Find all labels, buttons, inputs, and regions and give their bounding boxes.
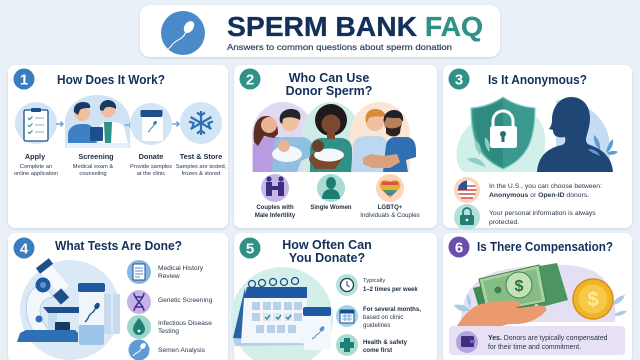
main banknote: $ bbox=[515, 278, 524, 295]
illustration: families bbox=[252, 102, 416, 172]
text: donor choice bbox=[489, 183, 602, 199]
list: tests bbox=[127, 260, 213, 360]
subtitle: Answers to common questions about sperm donation bbox=[227, 43, 453, 52]
label: Testing bbox=[158, 328, 179, 335]
illustration: hand holding money and coin bbox=[454, 263, 627, 326]
step labels: Apply bbox=[25, 152, 46, 161]
step labels: Provide samples bbox=[130, 164, 172, 170]
label: Infectious Disease bbox=[158, 320, 212, 327]
step labels: counseling bbox=[79, 171, 107, 177]
leaves bbox=[467, 137, 490, 168]
panel 4: what tests are done bbox=[8, 233, 228, 360]
heading: How Does It Work? bbox=[57, 73, 165, 87]
text: donor choice: Anonymous or Open-ID donors. bbox=[489, 192, 589, 199]
number badge 1 bbox=[14, 68, 34, 90]
label: based on clinic bbox=[363, 314, 403, 321]
labels: Individuals & Couples bbox=[360, 212, 420, 219]
panel 3: is it anonymous bbox=[443, 65, 632, 230]
icon: sperm logo bbox=[160, 11, 205, 55]
labels: LGBTQ+ bbox=[378, 205, 403, 211]
heading: Who Can Use bbox=[289, 71, 369, 85]
icon: couples bbox=[261, 174, 289, 202]
icon: DNA bbox=[127, 290, 151, 314]
label bbox=[363, 306, 421, 329]
heading: Is There Compensation? bbox=[477, 240, 613, 254]
callout text bbox=[488, 335, 608, 351]
list: frequency bbox=[336, 274, 421, 356]
label bbox=[158, 265, 204, 280]
heading: What Tests Are Done? bbox=[55, 238, 182, 253]
header banner bbox=[140, 5, 500, 57]
panel 5: how often can you donate bbox=[231, 233, 437, 360]
step labels: frozen & stored bbox=[182, 171, 220, 177]
number badge 2: 2 bbox=[246, 72, 254, 88]
step labels: at the clinic bbox=[137, 171, 165, 177]
illustration: shield and silhouette bbox=[456, 97, 618, 172]
labels: Single Women bbox=[310, 205, 352, 211]
number badge 4: 4 bbox=[20, 240, 29, 258]
label: Genetic Screening bbox=[158, 297, 213, 304]
label: 1–2 times per week bbox=[363, 287, 418, 293]
number badge 1: 1 bbox=[20, 72, 28, 88]
labels bbox=[255, 205, 420, 219]
heading: You Donate? bbox=[289, 251, 365, 265]
icon: shield bbox=[471, 97, 535, 169]
label: Semen Analysis bbox=[158, 347, 206, 354]
title: SPERM BANK FAQ bbox=[227, 11, 483, 42]
icon: calendar bbox=[336, 305, 358, 327]
text: privacy: Your personal information is always bbox=[489, 210, 596, 217]
silhouette bbox=[537, 97, 613, 172]
step labels: Complete an bbox=[20, 164, 52, 170]
heading bbox=[286, 71, 372, 98]
label bbox=[363, 278, 418, 293]
heading: Is It Anonymous? bbox=[488, 73, 587, 87]
step labels: Medical exam & bbox=[73, 164, 113, 170]
callout text: Yes. Donors are typically compensated bbox=[488, 335, 608, 342]
icon: US flag bbox=[454, 177, 480, 203]
text: privacy: protected. bbox=[489, 219, 519, 226]
labels: Male Infertility bbox=[255, 213, 296, 219]
label: Health & safety bbox=[363, 339, 408, 346]
text: donor choice: In the U.S., you can choose between: bbox=[489, 183, 602, 190]
text: privacy bbox=[489, 210, 596, 226]
icon: snowflake bbox=[180, 102, 222, 144]
step labels: Test & Store bbox=[180, 152, 222, 161]
icon: donate cup bbox=[130, 103, 172, 145]
panel 2: who can use donor sperm bbox=[234, 65, 437, 228]
number badge 6 bbox=[448, 236, 470, 258]
panel 6: is there compensation bbox=[443, 233, 632, 360]
illustration: calendar and jar bbox=[231, 267, 333, 360]
hand bbox=[457, 301, 546, 326]
step labels: Donate bbox=[139, 152, 163, 161]
label: guidelines bbox=[363, 322, 390, 329]
number badge 6: 6 bbox=[455, 240, 463, 256]
step labels: Screening bbox=[78, 152, 114, 161]
step labels: online application bbox=[14, 171, 58, 177]
icon: wallet bbox=[456, 331, 478, 353]
label: For several months, bbox=[363, 306, 421, 313]
step labels: Samples are tested, bbox=[176, 164, 227, 170]
icon: medical history bbox=[127, 260, 151, 284]
icon: rainbow heart bbox=[376, 174, 404, 202]
illustration: screening bbox=[65, 95, 130, 148]
panel 1: how does it work bbox=[8, 65, 228, 228]
icon: health cross bbox=[336, 334, 358, 356]
label bbox=[363, 339, 408, 354]
step labels bbox=[14, 152, 227, 177]
main banknote bbox=[479, 265, 546, 313]
label: come first bbox=[363, 347, 392, 354]
labels: Couples with bbox=[256, 205, 294, 211]
label: Medical History bbox=[158, 265, 204, 272]
heading: Donor Sperm? bbox=[286, 84, 372, 98]
arrow bbox=[125, 122, 132, 128]
label bbox=[158, 320, 212, 335]
callout text: for their time and commitment. bbox=[488, 344, 581, 351]
number badge 3: 3 bbox=[455, 72, 463, 88]
arrow bbox=[56, 122, 63, 126]
heading bbox=[282, 238, 372, 265]
heading: How Often Can bbox=[282, 238, 372, 252]
number badge 5: 5 bbox=[246, 240, 254, 258]
label: Review bbox=[158, 273, 180, 280]
icon: apply clipboard bbox=[15, 102, 57, 144]
number badge 5 bbox=[240, 238, 260, 258]
icon: clock bbox=[336, 274, 358, 296]
number badge 2 bbox=[240, 68, 260, 90]
icon: single woman bbox=[317, 174, 345, 202]
number badge 3 bbox=[448, 68, 470, 90]
icon: sperm bbox=[128, 340, 150, 360]
number badge 4 bbox=[14, 238, 34, 258]
illustration: microscope and sample jar bbox=[17, 260, 120, 360]
icon: lock bbox=[454, 204, 480, 230]
icon: drop bbox=[127, 315, 151, 339]
callout bbox=[449, 326, 625, 355]
arrow bbox=[172, 122, 179, 126]
label: Typically bbox=[363, 278, 385, 284]
illustration: hand holding money and coin: $ bbox=[587, 289, 599, 311]
